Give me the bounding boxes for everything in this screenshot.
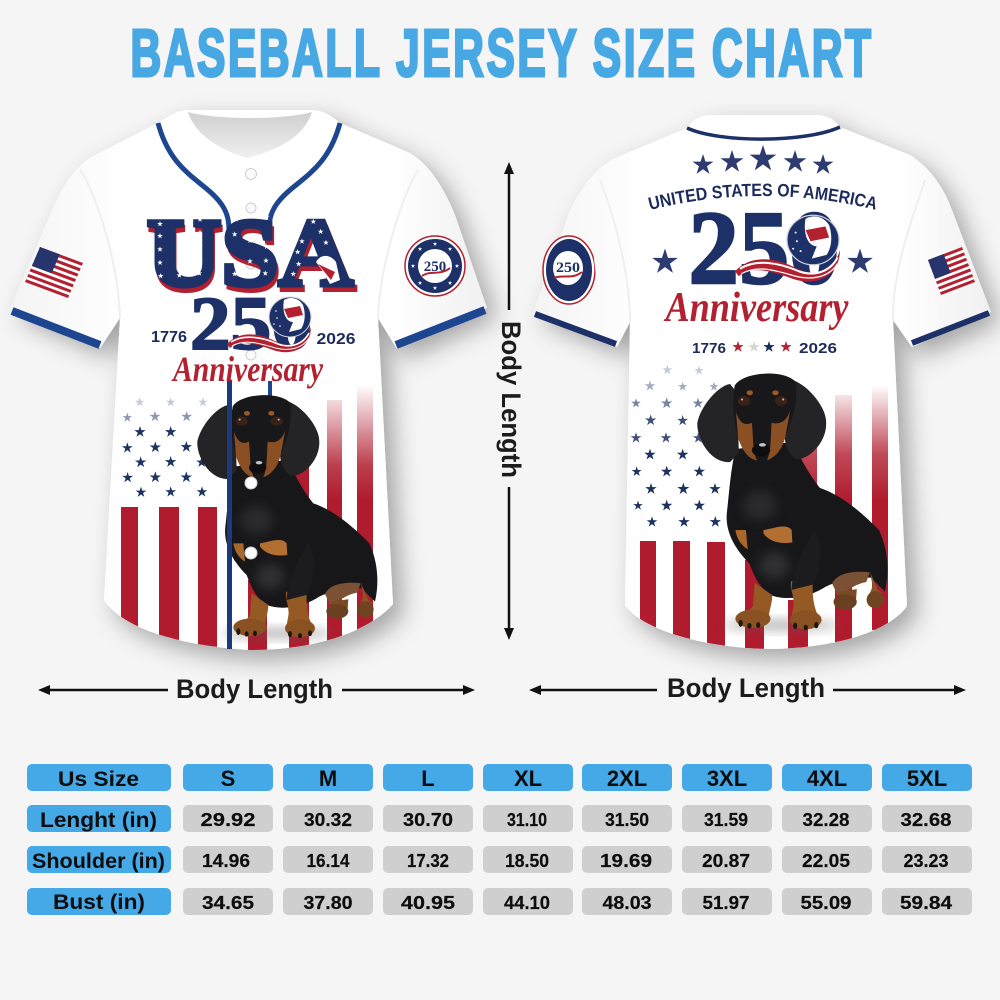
- row: length: 32.68: [900, 809, 952, 830]
- years and stars: [692, 341, 837, 357]
- row: shoulder: [27, 846, 972, 873]
- years and stars: 1776: [692, 341, 726, 357]
- cuffs: [535, 313, 989, 344]
- row: shoulder: 18.50: [505, 850, 549, 871]
- row: bust: [27, 888, 972, 915]
- Anniversary script: Anniversary: [663, 285, 849, 331]
- row: shoulder: Shoulder (in): [32, 849, 165, 873]
- USA lettering: USA: [147, 199, 353, 306]
- United States of America: UNITED STATES OF AMERICA: [648, 184, 876, 210]
- row: us size: 2XL: [607, 766, 647, 791]
- jersey back silhouette: [533, 115, 991, 649]
- row: shoulder: 22.05: [802, 850, 850, 871]
- panel: back of jersey: [534, 110, 1000, 674]
- row: shoulder: 19.69: [600, 850, 652, 871]
- sleeve patch: 250: [556, 260, 580, 276]
- row: length: Lenght (in): [40, 808, 157, 832]
- panel: front of jersey: [10, 110, 487, 657]
- row: length: 31.10: [507, 809, 547, 830]
- row: length: 31.59: [704, 809, 748, 830]
- row: length: 30.70: [403, 809, 453, 830]
- flag stars: [631, 365, 721, 527]
- cuffs: [12, 310, 485, 345]
- flag stars: [122, 397, 208, 497]
- placket line: [227, 381, 232, 649]
- arrow: front body width: Body Length: [176, 674, 333, 704]
- row: us size: M: [319, 766, 337, 791]
- row: bust: 40.95: [401, 892, 455, 913]
- top stars: [652, 145, 873, 273]
- row: bust: 34.65: [202, 892, 254, 913]
- placket line behind dog: [268, 381, 272, 401]
- row: us size: S: [221, 766, 235, 791]
- row: us size: 5XL: [907, 766, 947, 791]
- row: bust: 59.84: [900, 892, 953, 913]
- arrow: vertical body length: [496, 162, 526, 640]
- collar piping: [158, 123, 340, 232]
- row: bust: 48.03: [602, 892, 652, 913]
- row: us size: XL: [514, 766, 542, 791]
- dachshund illustration: [197, 395, 377, 639]
- collar piping: [687, 127, 840, 139]
- row: us size: 3XL: [707, 766, 747, 791]
- arched heading path: [650, 196, 876, 210]
- buttons: [245, 168, 257, 559]
- row: us size: [27, 764, 972, 791]
- flag stripes: [640, 385, 888, 650]
- year 1776: 1776: [151, 329, 187, 346]
- dachshund illustration: [697, 374, 887, 631]
- row: us size: L: [421, 766, 435, 791]
- years and stars: 2026: [799, 341, 837, 357]
- year 2026: 2026: [316, 331, 356, 348]
- sleeve patch: 250: [424, 259, 446, 275]
- 250 logo back: 250: [688, 189, 840, 306]
- row: length: 32.28: [802, 809, 850, 830]
- row: bust: 44.10: [504, 892, 550, 913]
- USA lettering: USA: [148, 204, 356, 311]
- right sleeve flag: [928, 247, 975, 295]
- flag stripes: [121, 380, 373, 657]
- row: shoulder: 20.87: [702, 850, 750, 871]
- jersey front silhouette: [10, 110, 487, 650]
- sleeve seams: [600, 180, 925, 322]
- row: bust: Bust (in): [53, 890, 145, 914]
- arrow: back body width: Body Length: [667, 673, 825, 703]
- row: bust: 51.97: [702, 892, 750, 913]
- size chart table: [27, 764, 972, 915]
- sleeve seams: [80, 170, 418, 318]
- sleeve patch: [405, 236, 465, 296]
- row: length: 31.50: [605, 809, 649, 830]
- sleeve patch: [543, 236, 595, 304]
- row: length: 30.32: [304, 809, 352, 830]
- 250 logo: 250: [190, 282, 312, 366]
- row: shoulder: 16.14: [306, 850, 350, 871]
- Anniversary script: Anniversary: [171, 349, 324, 389]
- row: length: [27, 805, 972, 832]
- row: bust: 37.80: [304, 892, 352, 913]
- row: bust: 55.09: [800, 892, 852, 913]
- row: us size: 4XL: [807, 766, 847, 791]
- arrow: vertical body length: Body Length: [496, 321, 526, 478]
- row: length: 29.92: [200, 809, 256, 830]
- row: shoulder: 14.96: [202, 850, 250, 871]
- row: shoulder: 23.23: [904, 850, 948, 871]
- left sleeve flag: [25, 247, 83, 298]
- row: us size: Us Size: [58, 767, 139, 791]
- neck opening: [188, 112, 312, 158]
- arrow: front body width: [38, 674, 475, 704]
- arrow: back body width: [529, 673, 966, 703]
- row: shoulder: 17.32: [407, 850, 449, 871]
